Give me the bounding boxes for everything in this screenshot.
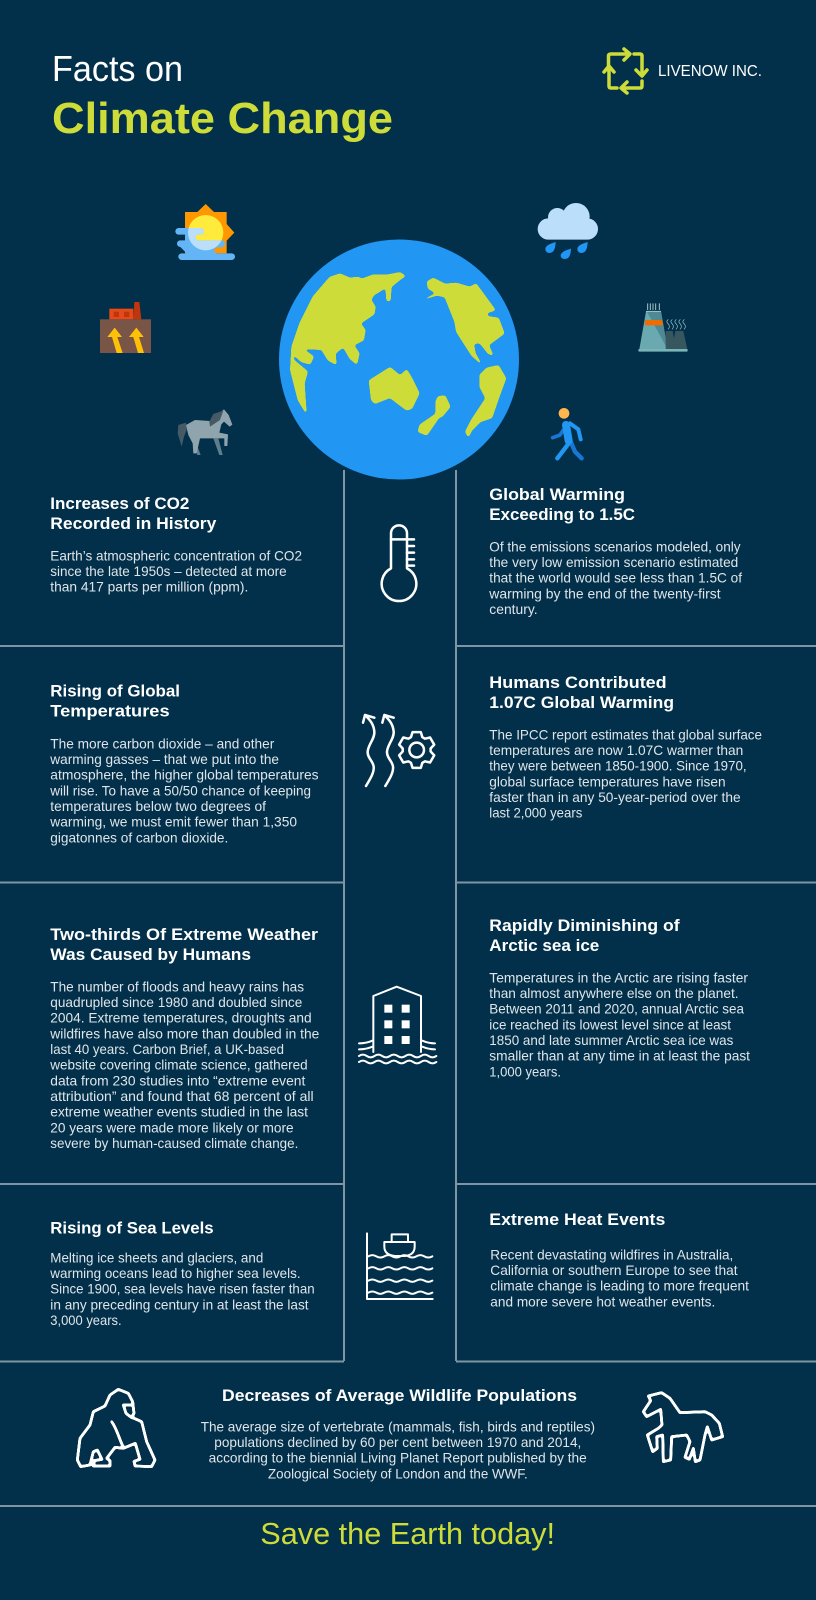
panel: extreme weather (49, 926, 319, 1151)
body text: and more severe hot weather events. (490, 1294, 715, 1309)
body text: website covering climate science, gathered (49, 1058, 308, 1073)
heading: Extreme Heat Events (489, 1211, 665, 1229)
body text: 20 years were made more likely or more (50, 1120, 294, 1135)
heading (50, 926, 319, 964)
panel: humans contributed warming (489, 674, 762, 821)
body text: populations declined by 60 per cent between 1970 and 2014, (214, 1435, 581, 1450)
heading: Increases of CO2 (50, 495, 189, 513)
body text: Earth’s atmospheric concentration of CO2 (50, 548, 302, 563)
body text: century. (489, 602, 538, 617)
logo: LIVENOW INC.: LIVENOW INC. (658, 63, 762, 80)
heading: Rapidly Diminishing of (489, 917, 680, 935)
body text: temperatures are now 1.07C warmer than (489, 743, 743, 758)
logo: LIVENOW INC. (604, 49, 762, 93)
icon: sun behind cloud (175, 204, 235, 260)
heading: Rising of Global (50, 683, 180, 701)
body text: California or southern Europe to see that (490, 1263, 738, 1278)
body text: Zoological Society of London and the WWF. (268, 1466, 528, 1481)
icon: grey horse (178, 409, 232, 455)
body text (489, 727, 762, 821)
body text: than almost anywhere else on the planet. (489, 986, 739, 1001)
body text: The IPCC report estimates that global surface (489, 727, 762, 742)
body text (49, 979, 319, 1151)
icon: walking person (553, 408, 582, 458)
heading (489, 674, 674, 712)
panel: global warming exceeding 1.5C (488, 486, 742, 617)
heading: Humans Contributed (489, 674, 667, 692)
body text: faster than in any 50-year-period over the (489, 790, 741, 805)
heading: Exceeding to 1.5C (489, 506, 635, 524)
heading: Rising of Sea Levels (50, 1220, 214, 1238)
body text: Of the emissions scenarios modeled, only (489, 539, 741, 554)
body text: severe by human-caused climate change. (50, 1136, 298, 1151)
body text (201, 1419, 595, 1481)
body text (490, 1247, 749, 1309)
body text: warming oceans lead to higher sea levels. (49, 1266, 301, 1281)
icon: rain cloud (538, 203, 598, 259)
body text: that the world would see less than 1.5C of (489, 571, 742, 586)
icon: power plant (638, 303, 688, 352)
body text: Since 1900, sea levels have risen faster than (50, 1282, 315, 1297)
body text: since the late 1950s – detected at more (50, 564, 287, 579)
body text: 1850 and late summer Arctic sea ice was (489, 1033, 733, 1048)
body text: ice reached its lowest level since at least (489, 1017, 731, 1032)
body text: warming gasses – that we put into the (49, 752, 279, 767)
heading (489, 917, 680, 955)
panel: extreme heat events (489, 1211, 749, 1309)
icon: thermometer (382, 525, 416, 601)
body text: they were between 1850-1900. Since 1970, (489, 759, 747, 774)
body text: than 417 parts per million (ppm). (50, 580, 248, 595)
body text: warming, we must emit fewer than 1,350 (49, 815, 297, 830)
body text: global surface temperatures have risen (489, 774, 726, 789)
body text: 3,000 years. (50, 1313, 122, 1328)
body text: according to the biennial Living Planet Report published by the (209, 1451, 587, 1466)
body text (489, 970, 750, 1079)
panel: wildlife populations (201, 1387, 595, 1481)
body text: gigatonnes of carbon dioxide. (50, 830, 228, 845)
body text: extreme weather events studied in the last (50, 1105, 308, 1120)
panel: rising global temperatures (49, 683, 319, 845)
body text: atmosphere, the higher global temperatures (50, 768, 319, 783)
heading (50, 683, 180, 721)
body text (49, 736, 319, 845)
icon: factory heat (100, 302, 151, 353)
icon: recycle arrows (604, 49, 647, 93)
title: Climate Change (52, 94, 393, 143)
heading: Decreases of Average Wildlife Populations (222, 1387, 577, 1405)
heading (50, 495, 217, 533)
closing call to action: Save the Earth today! (260, 1516, 555, 1551)
heading: Recorded in History (50, 515, 217, 533)
body text (49, 1250, 315, 1328)
body text: Melting ice sheets and glaciers, and (50, 1250, 263, 1265)
body text: 1,000 years. (489, 1064, 561, 1079)
body text: Temperatures in the Arctic are rising faster (489, 970, 748, 985)
body text: will rise. To have a 50/50 chance of keeping (49, 783, 311, 798)
panel: CO2 increases (50, 495, 302, 595)
title: Facts on (52, 48, 183, 89)
heading: Was Caused by Humans (50, 946, 251, 964)
body text: climate change is leading to more frequent (490, 1279, 749, 1294)
body text (50, 548, 302, 595)
icon: horse outline (643, 1393, 723, 1462)
body text: quadrupled since 1980 and doubled since (50, 995, 302, 1010)
body text: in any preceding century in at least the last (50, 1297, 309, 1312)
body text: smaller than at any time in at least the past (489, 1049, 750, 1064)
body text: last 40 years. Carbon Brief, a UK-based (50, 1042, 284, 1057)
body text: warming by the end of the twenty-first (488, 586, 721, 601)
body text: attribution” and found that 68 percent of all (50, 1089, 314, 1104)
icon: ship on rising water (367, 1233, 433, 1299)
body text: 2004. Extreme temperatures, droughts and (50, 1011, 312, 1026)
body text: The more carbon dioxide – and other (50, 736, 275, 751)
heading: 1.07C Global Warming (489, 694, 674, 712)
body text: The number of floods and heavy rains has (50, 979, 304, 994)
body text: last 2,000 years (489, 806, 582, 821)
heading: Arctic sea ice (489, 937, 599, 955)
heading: Global Warming (489, 486, 625, 504)
icon: gorilla (77, 1389, 155, 1467)
body text: Between 2011 and 2020, annual Arctic sea (489, 1002, 744, 1017)
body text: wildfires have also more than doubled in the (49, 1026, 319, 1041)
panel: rising sea levels (49, 1220, 315, 1328)
body text: The average size of vertebrate (mammals, fish, birds and reptiles) (201, 1419, 595, 1434)
icon: flooded building (359, 987, 436, 1063)
body text: the very low emission scenario estimated (489, 555, 738, 570)
body text (488, 539, 742, 617)
heading (489, 486, 635, 524)
heading: Temperatures (50, 703, 170, 721)
panel: arctic sea ice (489, 917, 750, 1079)
title (52, 48, 393, 143)
body text: Recent devastating wildfires in Australia, (490, 1247, 733, 1262)
heading: Two-thirds Of Extreme Weather (50, 926, 319, 944)
icon: heat waves and gear (363, 715, 434, 786)
illustration: globe (279, 240, 519, 480)
body text: data from 230 studies into “extreme event (50, 1073, 306, 1088)
body text: temperatures below two degrees of (50, 799, 266, 814)
